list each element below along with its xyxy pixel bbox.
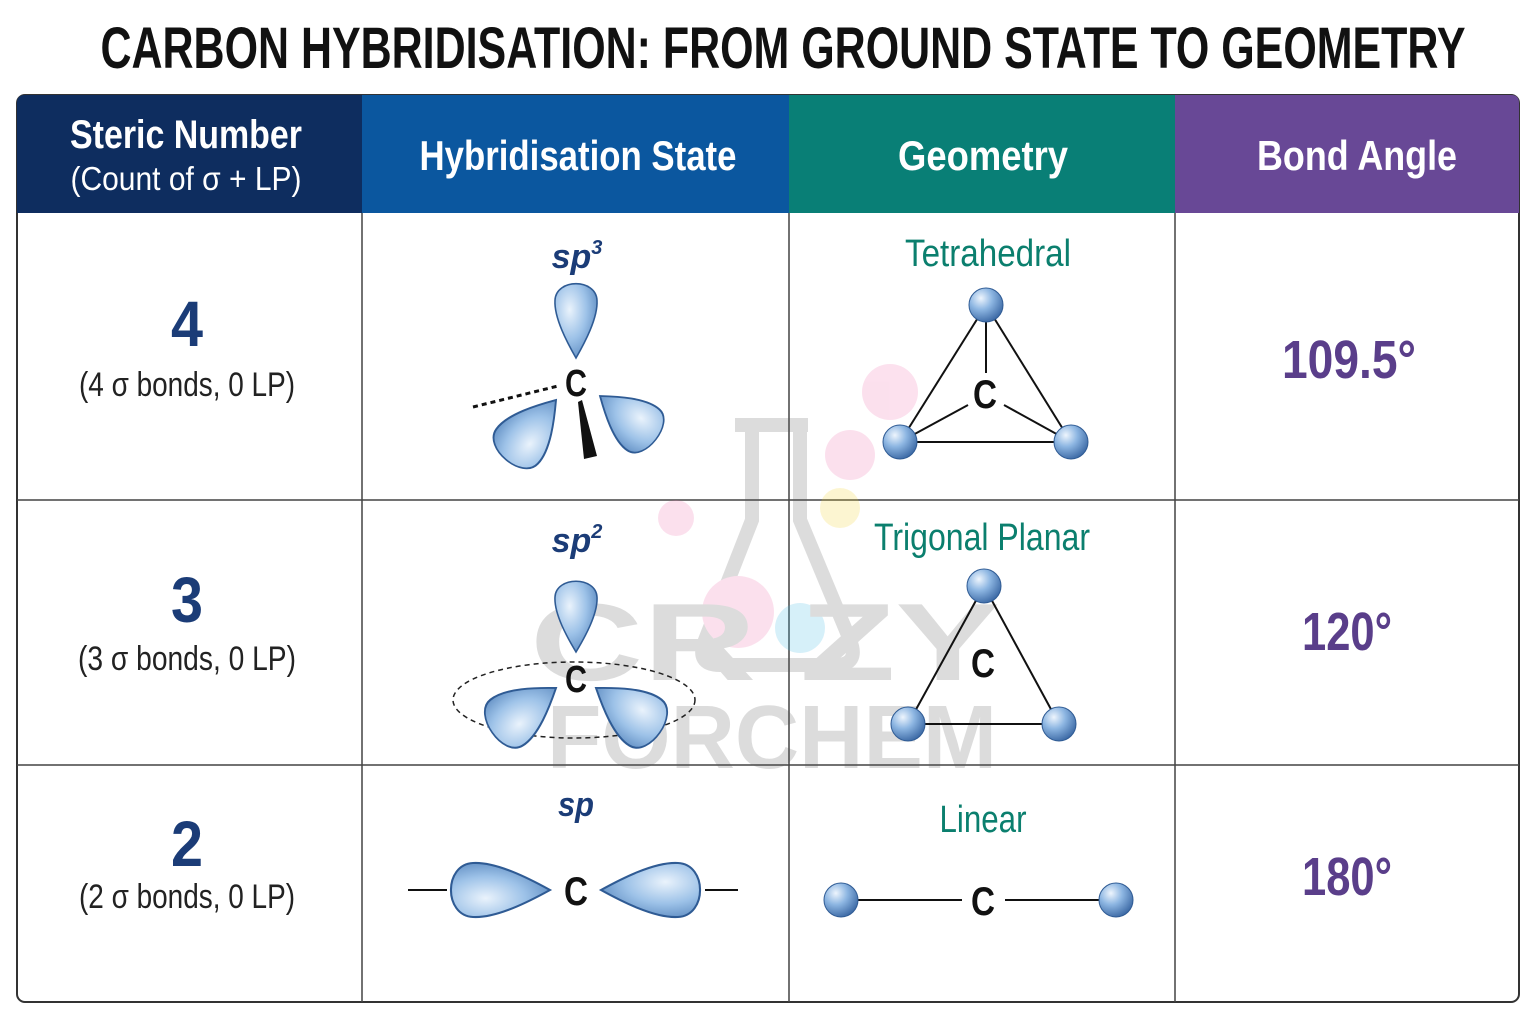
header: geometry: Geometry (898, 132, 1069, 179)
row 2: steric number 3: 3 (171, 564, 203, 636)
row 1: sp3 diagram: sp (552, 238, 591, 276)
row 1: tetrahedral: Tetrahedral (905, 233, 1071, 275)
row 3: sp diagram: C (564, 870, 588, 914)
row 2: sp2 diagram: sp (552, 522, 591, 560)
watermark: FORCHEM (547, 688, 997, 788)
row 1: tetrahedral (883, 233, 1088, 459)
row 3: sp diagram: sp (558, 786, 594, 824)
row 3: linear: C (971, 880, 995, 924)
row 2: sp2 diagram: 2 (590, 521, 602, 543)
header: geometry (789, 95, 1175, 213)
header: bond angle: Bond Angle (1257, 132, 1457, 179)
header: steric number: (Count of σ + LP) (70, 160, 302, 197)
header: hybridisation: Hybridisation State (420, 132, 736, 179)
row 1: tetrahedral: C (973, 373, 997, 417)
row 3: linear (824, 799, 1133, 924)
row 1: sp3 diagram: 3 (591, 237, 602, 259)
row 2: angle: 120° (1302, 602, 1392, 662)
row 1: sp3 diagram: C (565, 363, 587, 405)
watermark (530, 364, 1000, 788)
row 1: sp3 diagram (473, 237, 672, 477)
row 3: linear: Linear (940, 799, 1027, 841)
row 2: sp2 diagram (453, 521, 695, 756)
watermark: CR ZY (530, 581, 1000, 704)
row 2: sp2 diagram: C (565, 659, 587, 701)
row 2: steric number 3: (3 σ bonds, 0 LP) (78, 640, 296, 678)
row 2: trigonal planar (874, 517, 1090, 741)
row 1: angle: 109.5° (1282, 330, 1416, 390)
row 3: angle: 180° (1302, 847, 1392, 907)
row 2: trigonal planar: C (971, 642, 995, 686)
row 3: steric number 2: 2 (171, 808, 203, 880)
row 3: steric number 2: (2 σ bonds, 0 LP) (79, 878, 295, 916)
header: bond angle (1175, 95, 1519, 213)
header: steric number: Steric Number (70, 113, 302, 157)
row 2: steric number 3 (78, 564, 296, 678)
row 3: sp diagram (408, 786, 738, 917)
header: hybridisation (362, 95, 789, 213)
row 2: trigonal planar: Trigonal Planar (874, 517, 1090, 559)
header: steric number (17, 95, 362, 213)
row 1: steric number 4 (79, 288, 295, 404)
row 1: steric number 4: (4 σ bonds, 0 LP) (79, 366, 295, 404)
row 1: steric number 4: 4 (171, 288, 203, 360)
row 3: steric number 2 (79, 808, 295, 916)
